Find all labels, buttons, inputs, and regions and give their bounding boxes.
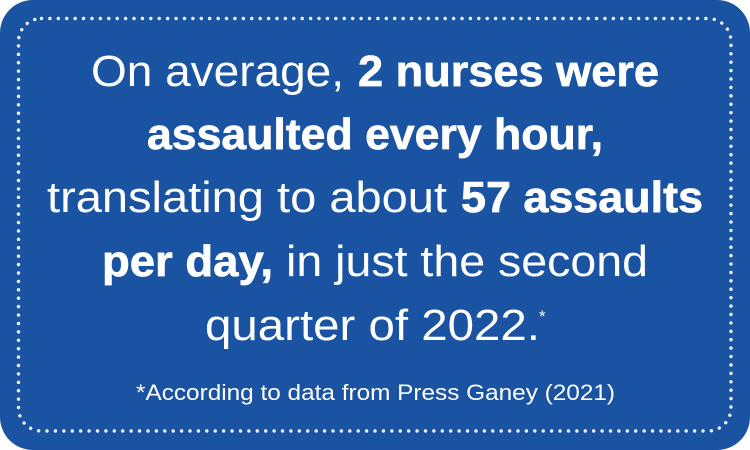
- line 3: [47, 173, 703, 222]
- line 4: [102, 237, 648, 286]
- line 5: *: [539, 307, 546, 326]
- footnote: *According to data from Press Ganey (2021): [136, 380, 615, 405]
- line 1: On average,: [91, 47, 344, 96]
- line 4: in just the second: [286, 237, 648, 286]
- line 5: quarter of 2022.: [205, 301, 540, 350]
- main statement text: [47, 47, 703, 350]
- line 1: 2 nurses were: [358, 47, 659, 96]
- line 3: translating to about: [47, 173, 447, 222]
- line 1: [91, 47, 659, 96]
- line 3: 57 assaults: [461, 173, 703, 222]
- line 4: per day,: [102, 237, 273, 286]
- line 2: assaulted every hour,: [147, 110, 603, 159]
